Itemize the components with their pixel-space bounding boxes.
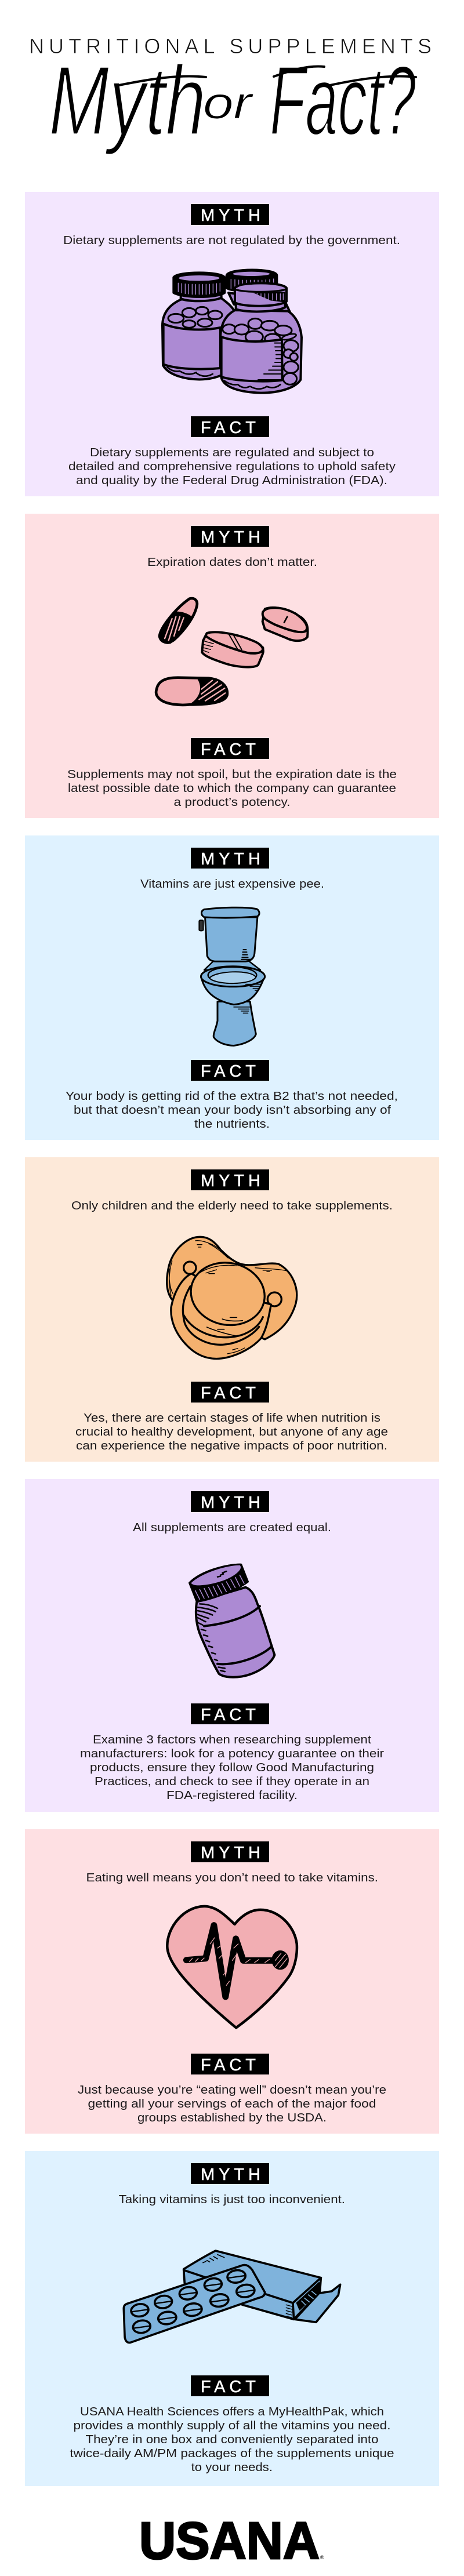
panel background	[25, 2151, 439, 2486]
fact text: manufacturers: look for a potency guarantee on their	[80, 1747, 384, 1760]
fact text: a product’s potency.	[174, 796, 290, 809]
logo: USANA: ®	[320, 2555, 324, 2560]
panel: myth 3 expensive pee	[25, 835, 439, 1140]
myth badge: MYTH	[201, 1494, 260, 1512]
fact text: products, ensure they follow Good Manufacturing	[90, 1761, 374, 1774]
myth badge: MYTH	[201, 528, 260, 547]
fact text: twice-daily AM/PM packages of the supplements unique	[70, 2447, 394, 2460]
fact text	[80, 1734, 384, 1802]
icon: blister pack and box	[124, 2251, 340, 2343]
fact text: the nutrients.	[194, 1118, 270, 1131]
panel: myth 7 inconvenient	[25, 2151, 439, 2486]
fact badge: FACT	[201, 1062, 256, 1081]
myth text: Expiration dates don’t matter.	[147, 556, 317, 569]
fact badge: FACT	[201, 1384, 256, 1403]
panel: myth 1 government regulation	[25, 192, 439, 496]
myth text: Taking vitamins is just too inconvenient.	[119, 2193, 345, 2206]
fact text: FDA-registered facility.	[166, 1789, 298, 1802]
icon: toilet	[199, 907, 265, 1045]
myth text: All supplements are created equal.	[133, 1521, 331, 1534]
myth text: Dietary supplements are not regulated by the government.	[63, 234, 400, 247]
fact text: provides a monthly supply of all the vitamins you need.	[73, 2419, 391, 2432]
fact text	[78, 2084, 386, 2124]
fact text: groups established by the USDA.	[137, 2112, 327, 2124]
fact text: latest possible date to which the company can guarantee	[68, 782, 396, 795]
title: script heading: Myth	[49, 46, 206, 156]
myth text: Vitamins are just expensive pee.	[140, 878, 324, 891]
fact text: Just because you’re “eating well” doesn’t mean you’re	[78, 2084, 386, 2097]
fact text: They’re in one box and conveniently separated into	[86, 2433, 378, 2446]
myth badge: MYTH	[201, 1172, 260, 1190]
fact badge: FACT	[201, 2378, 256, 2396]
fact text: USANA Health Sciences offers a MyHealthPak, which	[80, 2406, 384, 2418]
title: script heading	[49, 46, 416, 156]
fact badge	[191, 2375, 269, 2396]
panel background	[25, 514, 439, 818]
title: script heading: or	[203, 77, 254, 128]
fact badge: FACT	[201, 740, 256, 759]
fact badge	[191, 738, 269, 759]
myth text: Only children and the elderly need to take supplements.	[71, 1200, 393, 1212]
fact badge: FACT	[201, 2056, 256, 2074]
fact text: Examine 3 factors when researching supplement	[93, 1734, 371, 1746]
panel: myth 6 eating well	[25, 1829, 439, 2134]
myth badge: MYTH	[201, 850, 260, 869]
myth badge	[191, 1491, 269, 1512]
panel: myth 4 children and elderly	[25, 1157, 439, 1462]
fact badge	[191, 1703, 269, 1724]
fact text	[75, 1412, 388, 1452]
myth badge: MYTH	[201, 1844, 260, 1862]
title: eyebrow: NUTRITIONAL SUPPLEMENTS	[29, 34, 432, 58]
title	[29, 34, 432, 156]
panel: myth 5 all supplements equal	[25, 1479, 439, 1812]
icon: pills	[156, 598, 308, 705]
fact text: Yes, there are certain stages of life when nutrition is	[84, 1412, 380, 1425]
myth badge	[191, 204, 269, 225]
panel background	[25, 1157, 439, 1462]
fact text: but that doesn’t mean your body isn’t absorbing any of	[74, 1104, 391, 1117]
fact text	[67, 768, 397, 809]
fact text: to your needs.	[191, 2461, 273, 2474]
fact badge	[191, 2054, 269, 2074]
fact text: Dietary supplements are regulated and subject to	[90, 446, 374, 459]
fact text: Supplements may not spoil, but the expiration date is the	[67, 768, 397, 781]
icon: tilted supplement bottle	[190, 1564, 274, 1677]
myth badge	[191, 1169, 269, 1190]
fact badge: FACT	[201, 1706, 256, 1724]
fact text: Your body is getting rid of the extra B2 that’s not needed,	[66, 1090, 398, 1103]
myth badge	[191, 848, 269, 869]
panel background	[25, 1479, 439, 1812]
panel background	[25, 835, 439, 1140]
logo: USANA: USANA	[139, 2512, 320, 2570]
myth badge	[191, 526, 269, 547]
fact badge: FACT	[201, 419, 256, 437]
fact text	[66, 1090, 398, 1131]
fact text: can experience the negative impacts of poor nutrition.	[76, 1440, 387, 1452]
icon: supplement bottles	[162, 270, 302, 393]
fact badge	[191, 1382, 269, 1403]
myth badge: MYTH	[201, 206, 260, 225]
myth badge: MYTH	[201, 2166, 260, 2184]
fact text: detailed and comprehensive regulations to uphold safety	[68, 460, 396, 473]
panel: myth 2 expiration dates	[25, 514, 439, 818]
fact text: Practices, and check to see if they operate in an	[95, 1775, 369, 1788]
panel background	[25, 1829, 439, 2134]
panel background	[25, 192, 439, 496]
myth badge	[191, 2163, 269, 2184]
fact text	[70, 2406, 394, 2474]
fact badge	[191, 416, 269, 437]
icon: heart with pulse	[167, 1906, 297, 2028]
myth badge	[191, 1841, 269, 1862]
myth text: Eating well means you don’t need to take vitamins.	[86, 1872, 378, 1884]
fact text: crucial to healthy development, but anyone of any age	[75, 1426, 388, 1438]
fact text: getting all your servings of each of the major food	[88, 2098, 376, 2110]
icon: pacifier	[167, 1237, 297, 1358]
fact badge	[191, 1060, 269, 1081]
fact text	[68, 446, 396, 487]
fact text: and quality by the Federal Drug Administration (FDA).	[76, 474, 387, 487]
